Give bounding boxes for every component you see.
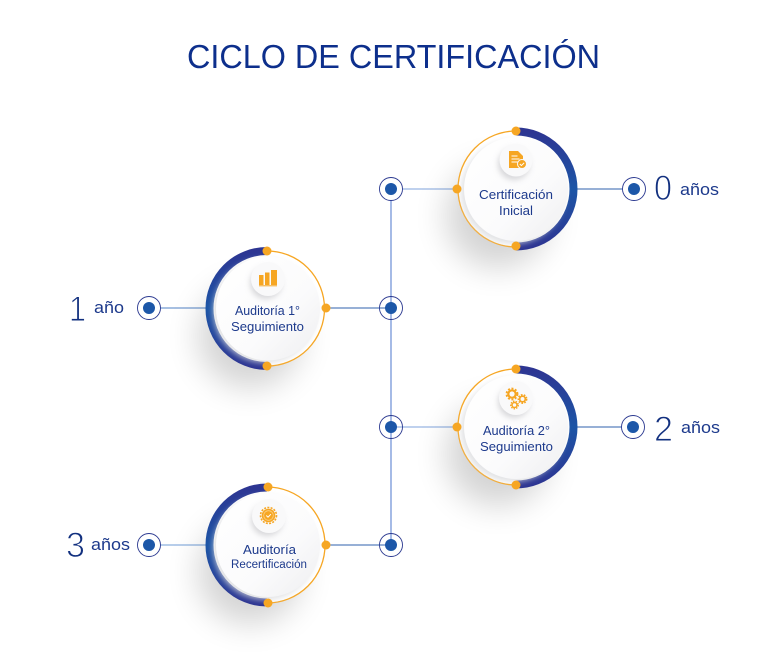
node: third centre [380, 416, 402, 438]
label: 0 años: 0 [654, 169, 672, 208]
label: Certificación Inicial: Inicial [499, 204, 533, 218]
label: Certificación Inicial: Certificación [479, 188, 553, 202]
node: 1 año [138, 296, 160, 320]
title: CICLO DE CERTIFICACIÓN [187, 38, 600, 75]
label: 1 año [69, 290, 124, 329]
node: 2 años [622, 416, 644, 438]
icon: bar chart [250, 262, 285, 299]
label: Auditoría 2° Seguimiento: Seguimiento [480, 440, 553, 454]
label: Auditoría 2° Seguimiento [480, 424, 553, 454]
panel: Certificación Inicial [446, 126, 574, 268]
icon: certificate document [498, 144, 532, 180]
node: bottom centre [380, 534, 402, 556]
label: 2 años [654, 410, 720, 449]
label: 2 años: 2 [654, 410, 673, 449]
label: Auditoría 1° Seguimiento: Seguimiento [231, 320, 304, 334]
node: 3 años [138, 534, 160, 556]
icon: gears [498, 381, 533, 418]
label: 2 años: años [681, 419, 720, 437]
label: Auditoría 1° Seguimiento [231, 304, 304, 334]
label: Auditoría 2° Seguimiento: Auditoría 2° [483, 424, 550, 438]
label: 1 año: año [94, 299, 124, 317]
panel: Auditoría 1° Seguimiento [198, 246, 330, 388]
panel: Auditoría Recertificación [198, 482, 330, 624]
label: 3 años: 3 [66, 526, 85, 565]
icon: quality seal [251, 499, 286, 536]
connector lines [150, 189, 633, 545]
label: Certificación Inicial [479, 188, 553, 218]
node: top centre [380, 178, 402, 200]
label: 0 años: años [680, 181, 719, 199]
label: Auditoría Recertificación: Recertificación [231, 559, 307, 571]
node: second centre [380, 296, 402, 320]
label: 0 años [654, 169, 719, 208]
panel: Auditoría 2° Seguimiento [446, 364, 574, 506]
label: Auditoría 1° Seguimiento: Auditoría 1° [235, 304, 300, 318]
node: 0 años [622, 178, 646, 200]
label: 1 año: 1 [69, 290, 86, 329]
label: Auditoría Recertificación [231, 543, 307, 571]
label: Auditoría Recertificación: Auditoría [243, 543, 296, 557]
label: 3 años [66, 526, 130, 565]
label: 3 años: años [91, 536, 130, 554]
